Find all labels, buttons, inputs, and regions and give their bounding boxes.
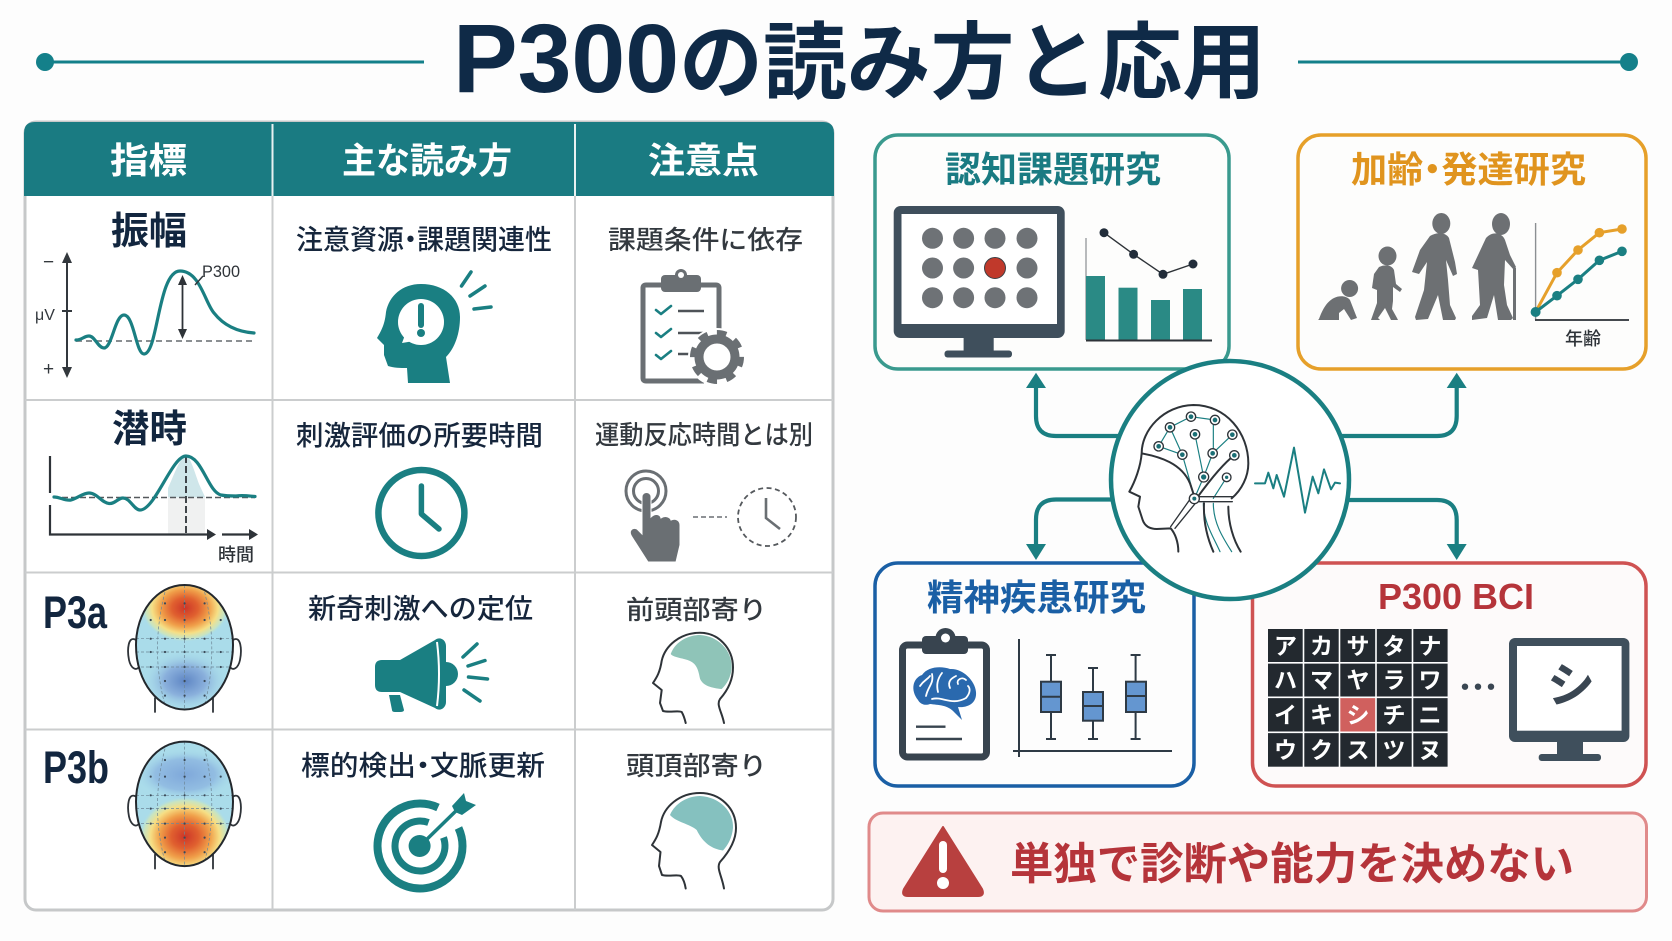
warning text: 単独で診断や能力を決めない: [1010, 840, 1574, 889]
speller grid: シ: [1346, 702, 1370, 728]
chart: latency waveform: 時間: [218, 545, 254, 565]
speller grid: ラ: [1382, 667, 1406, 693]
speller grid: ス: [1346, 737, 1370, 763]
arrow: to psychiatric research: [1026, 500, 1114, 560]
speller grid: ハ: [1274, 667, 1297, 693]
chart: amplitude waveform: −: [43, 252, 54, 273]
panel heading: 加齢・発達研究: [1351, 149, 1586, 190]
chart: amplitude waveform: P300: [202, 262, 240, 281]
text: latency reading: 刺激評価の所要時間: [296, 420, 543, 451]
signal wave: [1255, 448, 1340, 513]
row heading: latency: 潜時: [112, 409, 187, 451]
chart: amplitude waveform: +: [43, 359, 54, 380]
speller grid: ヤ: [1346, 667, 1370, 693]
icon: clipboard with brain: [902, 628, 986, 757]
icon: monitor stimulus grid: [894, 206, 1065, 358]
hub: EEG cap head circle: [1111, 361, 1349, 599]
chart: amplitude waveform: μV: [35, 307, 55, 324]
table header: [24, 122, 834, 196]
text: amplitude reading: 注意資源・課題関連性: [296, 224, 552, 255]
speller grid: ナ: [1418, 633, 1442, 659]
text: amplitude caution: 課題条件に依存: [608, 225, 803, 255]
speller grid: ウ: [1274, 737, 1297, 763]
speller grid: マ: [1310, 667, 1333, 693]
panel: aging and development research: [1298, 135, 1646, 369]
speller grid: イ: [1274, 702, 1297, 728]
row heading: P3a: P3a: [43, 587, 108, 638]
title rule left: [36, 53, 424, 71]
row heading: amplitude: 振幅: [111, 211, 187, 253]
icon: clock: [378, 470, 464, 556]
title: P300の読み方と応用: [453, 4, 1266, 113]
speller grid: ワ: [1418, 667, 1442, 693]
title rule right: [1298, 53, 1638, 71]
ellipsis dots: [1462, 684, 1494, 690]
table header: 指標: [110, 140, 187, 181]
icon: head with exclamation: [377, 272, 491, 383]
speller grid: タ: [1382, 633, 1406, 659]
arrow: to P300 BCI: [1346, 500, 1467, 560]
icon: megaphone: [375, 638, 488, 712]
icon: output monitor: シ: [1547, 660, 1595, 713]
icon: output monitor: [1509, 638, 1629, 761]
arrow: to cognitive task research: [1026, 373, 1120, 436]
icon: clipboard with gear: [643, 269, 746, 386]
panel: cognitive task research: [875, 135, 1229, 369]
row heading: P3b: P3b: [43, 742, 109, 793]
text: P3a caution: 前頭部寄り: [626, 595, 767, 625]
chart: age trajectories: [1531, 223, 1629, 349]
icon: EEG head: [1129, 405, 1248, 552]
icon: target with arrow: [377, 793, 476, 889]
speller grid: キ: [1310, 702, 1333, 728]
speller grid: ニ: [1418, 702, 1442, 728]
speller grid: ア: [1274, 633, 1297, 659]
chart: P3a scalp topography: [128, 574, 241, 712]
chart: amplitude waveform: [35, 252, 255, 380]
icon: head with frontal region: [653, 633, 733, 723]
text: P3a reading: 新奇刺激への定位: [308, 593, 533, 624]
table header: 主な読み方: [342, 140, 512, 181]
speller grid: サ: [1346, 633, 1370, 659]
speller grid: [1268, 629, 1448, 767]
icon: press separate from clock: [626, 471, 796, 562]
table header: 注意点: [648, 140, 759, 181]
chart: bars and line: [1086, 228, 1212, 340]
text: P3b caution: 頭頂部寄り: [626, 751, 767, 781]
panel heading: 認知課題研究: [945, 149, 1161, 190]
speller grid: チ: [1382, 702, 1406, 728]
chart: age trajectories: 年齢: [1565, 329, 1601, 349]
panel: P300 BCI: [1252, 563, 1646, 786]
icon: head with parietal region: [652, 793, 736, 888]
panel heading: 精神疾患研究: [927, 577, 1146, 618]
text: P3b reading: 標的検出・文脈更新: [301, 750, 545, 781]
speller grid: ヌ: [1418, 737, 1442, 763]
chart: box plots: [1013, 639, 1172, 757]
callout: warning banner: [869, 813, 1646, 911]
icon: warning triangle: [903, 827, 983, 896]
panel: indicator table: [24, 122, 834, 910]
speller grid: ク: [1310, 737, 1333, 763]
text: latency caution: 運動反応時間とは別: [595, 420, 813, 450]
icon: life stages silhouettes: [1318, 213, 1516, 320]
panel: psychiatric research: [875, 563, 1194, 786]
panel heading: P300 BCI: [1378, 576, 1534, 617]
chart: P3b scalp topography: [128, 742, 241, 877]
speller grid: ツ: [1382, 737, 1406, 763]
speller grid: カ: [1310, 633, 1333, 659]
chart: latency waveform: [50, 456, 258, 565]
arrow: to aging research: [1340, 373, 1467, 436]
